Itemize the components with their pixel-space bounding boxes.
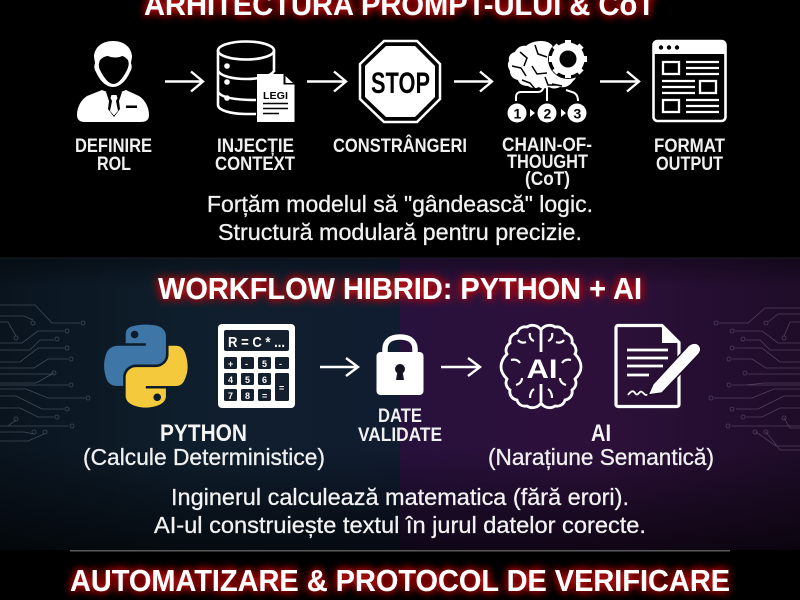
background: left navy half bbox=[0, 258, 400, 550]
decoration: left circuit traces bbox=[0, 305, 90, 441]
label: chain of thought: THOUGHT bbox=[507, 152, 588, 173]
label: chain of thought: (CoT) bbox=[525, 169, 570, 190]
icon: calculator bbox=[218, 324, 295, 408]
label: AI block: AI bbox=[591, 420, 611, 447]
panel: automation footer bbox=[0, 552, 800, 600]
text block: prompt description: Forțăm modelul să "gândească" logic. bbox=[207, 191, 593, 217]
arrow 4 bbox=[600, 72, 639, 92]
icon: database with legal document bbox=[218, 42, 294, 122]
label: context injection bbox=[215, 136, 295, 175]
arrow 2 bbox=[307, 72, 346, 92]
panel: hybrid workflow bbox=[0, 258, 800, 550]
arrow: lock to AI bbox=[441, 358, 480, 376]
label: validated data: DATE bbox=[378, 406, 422, 427]
arrow: calculator to lock bbox=[320, 358, 358, 376]
background: right purple half bbox=[400, 258, 800, 550]
label: context injection: CONTEXT bbox=[215, 154, 295, 175]
icon: calculator: R = C * ... bbox=[228, 334, 285, 351]
icon: brain with gear and three numbered steps: 1 bbox=[514, 106, 522, 122]
icon: database with legal document: LEGI bbox=[263, 90, 288, 102]
icon: brain with gear and three numbered steps: 2 bbox=[544, 106, 552, 122]
label: validated data: VALIDATE bbox=[358, 425, 442, 446]
icon: AI brain bbox=[501, 325, 581, 408]
icon: person with tie bbox=[77, 41, 149, 122]
label: chain of thought bbox=[502, 135, 592, 190]
label: python block: (Calcule Deterministice) bbox=[83, 444, 325, 470]
label: AI block bbox=[488, 420, 714, 470]
icon: calculator: 5 bbox=[262, 359, 267, 369]
icon: calculator: 6 bbox=[262, 375, 267, 385]
icon: calculator: = bbox=[279, 383, 284, 393]
icon: calculator: 5 bbox=[245, 375, 250, 385]
label: define role: DEFINIRE bbox=[75, 136, 152, 157]
icon: document with pen bbox=[616, 326, 701, 406]
icon: padlock bbox=[376, 337, 424, 395]
background: top black panel bbox=[0, 0, 800, 258]
text block: workflow description bbox=[154, 484, 646, 538]
label: output format: OUTPUT bbox=[656, 154, 723, 175]
icon: brain with gear and three numbered steps bbox=[508, 39, 588, 122]
label: define role: ROL bbox=[97, 154, 131, 175]
text block: prompt description bbox=[207, 191, 593, 245]
text block: workflow description: Inginerul calculează matematica (fără erori). bbox=[171, 484, 629, 510]
decoration: right circuit traces bbox=[709, 308, 800, 450]
icon: stop sign: STOP bbox=[371, 67, 430, 100]
label: python block bbox=[83, 420, 325, 470]
text block: workflow description: AI-ul construiește textul în jurul datelor corecte. bbox=[154, 512, 646, 538]
icon: brain with gear and three numbered steps: 3 bbox=[574, 106, 582, 122]
label: AI block: (Narațiune Semantică) bbox=[488, 444, 714, 470]
icon: calculator: 8 bbox=[245, 391, 250, 401]
divider line bbox=[70, 550, 730, 552]
label: constraints: CONSTRÂNGERI bbox=[333, 135, 467, 157]
panel: architecture of the prompt bbox=[75, 0, 726, 245]
heading: hybrid workflow: WORKFLOW HIBRID: PYTHON + AI bbox=[158, 271, 642, 306]
text block: prompt description: Structură modulară pentru precizie. bbox=[218, 219, 582, 245]
label: python block: PYTHON bbox=[160, 420, 247, 447]
icon: calculator: - bbox=[279, 359, 282, 369]
label: output format bbox=[654, 136, 725, 175]
arrow 1 bbox=[165, 72, 203, 92]
label: define role bbox=[75, 136, 152, 175]
icon: calculator: = bbox=[262, 391, 267, 401]
label: chain of thought: CHAIN-OF- bbox=[502, 135, 592, 156]
icon: AI brain: AI bbox=[526, 354, 558, 384]
label: context injection: INJECȚIE bbox=[217, 136, 294, 157]
icon: stop sign bbox=[360, 41, 440, 122]
labels: step captions bbox=[75, 135, 725, 190]
label: validated data bbox=[358, 406, 442, 446]
icon: calculator: 4 bbox=[228, 375, 233, 385]
heading: automation and verification protocol: AUTOMATIZARE & PROTOCOL DE VERIFICARE bbox=[70, 563, 730, 598]
icon: calculator: 7 bbox=[228, 391, 233, 401]
icon: calculator: - bbox=[245, 359, 248, 369]
icon: python logo bbox=[104, 325, 188, 408]
label: output format: FORMAT bbox=[654, 136, 725, 157]
arrow 3 bbox=[454, 72, 492, 92]
icon: calculator: + bbox=[228, 359, 233, 369]
icon: output format window bbox=[654, 41, 726, 121]
